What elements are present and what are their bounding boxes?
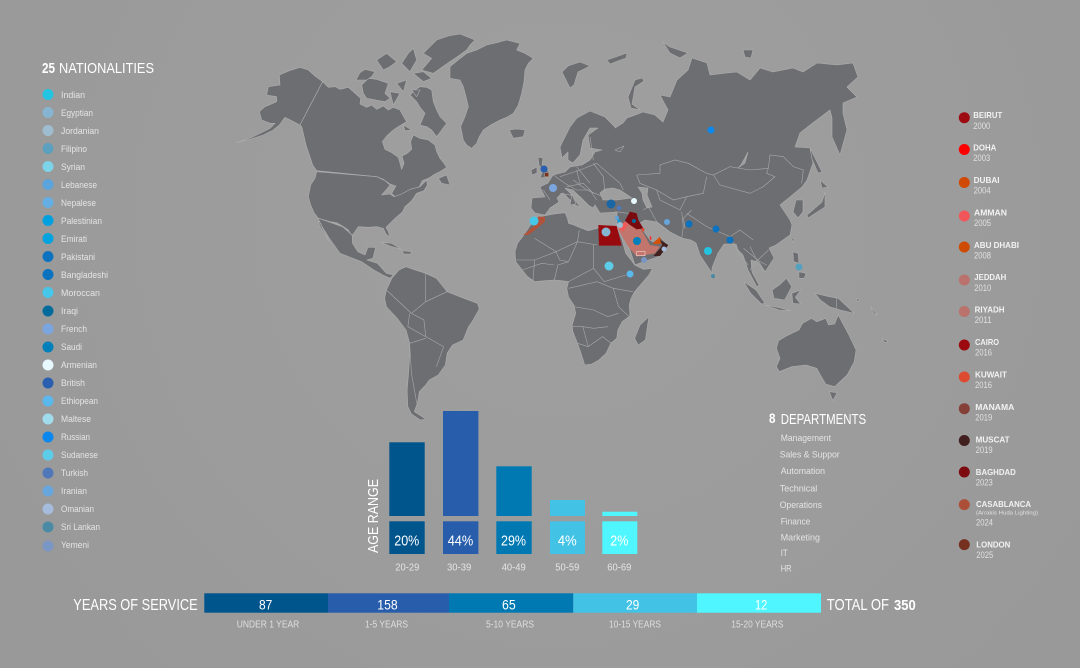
legend: nationalities: Russian (61, 432, 90, 443)
heading: 25 nationalities: 25 (42, 60, 55, 77)
North America and Arctic land (237, 34, 533, 242)
service labels: 1-5 YEARS (365, 620, 408, 631)
age labels: 50-59 (555, 563, 580, 574)
legend: office cities and years: 2005 (974, 218, 991, 228)
legend: nationalities: Iraqi (61, 306, 78, 317)
age labels: 20-29 (395, 563, 420, 574)
service labels: UNDER 1 YEAR (237, 620, 299, 631)
stacked bar: 12 (755, 596, 767, 612)
legend: office cities and years: 2003 (973, 153, 990, 163)
country: Jordan (617, 222, 628, 232)
legend: office cities and years: 2025 (976, 550, 993, 560)
legend: office cities and years: CASABLANCA (976, 499, 1031, 509)
legend: nationalities: Syrian (61, 162, 85, 173)
service labels: 15-20 YEARS (731, 620, 784, 631)
total of 350: TOTAL OF (827, 597, 889, 614)
legend: office cities and years: CAIRO (975, 337, 999, 347)
legend: office cities and years: 2000 (973, 121, 990, 131)
legend: office cities and years: 2023 (976, 478, 993, 488)
heading: 25 nationalities: NATIONALITIES (59, 60, 154, 77)
legend: office cities and years: 2019 (975, 413, 992, 423)
legend: nationalities (42, 89, 108, 552)
legend: office cities and years (959, 110, 1038, 560)
departments list: Sales & Suppor (780, 449, 840, 460)
legend: office cities and years: BAGHDAD (976, 467, 1016, 477)
departments list: Automation (781, 466, 825, 477)
legend: nationalities: Pakistani (61, 252, 95, 263)
legend: nationalities: Indian (61, 90, 85, 101)
legend: office cities and years: RIYADH (975, 304, 1005, 314)
country: Oman (653, 240, 668, 256)
legend: nationalities: Iranian (61, 486, 87, 497)
stacked bar: 29 (626, 596, 639, 612)
departments list: Finance (781, 516, 810, 527)
country borders (318, 137, 836, 403)
legend: office cities and years: 2004 (974, 186, 991, 196)
nationality markers on map (530, 126, 802, 278)
heading: years of service: YEARS OF SERVICE (73, 597, 198, 614)
legend: office cities and years: BEIRUT (973, 110, 1003, 120)
legend: office cities and years: 2010 (974, 283, 991, 293)
percentage boxes: 44% (448, 533, 473, 549)
legend: nationalities: Turkish (61, 468, 88, 479)
legend: office cities and years: 2024 (976, 518, 993, 528)
country: Saudi Arabia (618, 222, 660, 257)
legend: nationalities: Filipino (61, 144, 87, 155)
heading: 8 departments (769, 410, 866, 428)
chart: age range bars (365, 411, 637, 574)
service labels: 10-15 YEARS (609, 620, 661, 631)
Eurasia (531, 42, 858, 287)
legend: nationalities: Egyptian (61, 108, 93, 119)
legend: office cities and years: LONDON (976, 539, 1010, 549)
country: Morocco (523, 217, 545, 235)
legend: office cities and years: 2016 (975, 348, 992, 358)
country: Iraq (625, 212, 643, 229)
percentage boxes: 2% (610, 533, 628, 549)
percentage boxes: 4% (558, 533, 577, 549)
percentage boxes: 29% (501, 533, 526, 549)
departments list: Management (781, 433, 831, 444)
legend: nationalities: Lebanese (61, 180, 97, 191)
heading: 8 departments: DEPARTMENTS (781, 411, 866, 428)
percentage boxes: 20% (394, 533, 419, 549)
years of service bar (73, 593, 916, 631)
stacked bar: 87 (259, 596, 272, 612)
service labels: 5-10 YEARS (486, 620, 534, 631)
legend: office cities and years: MUSCAT (976, 435, 1010, 445)
country: Qatar (650, 236, 651, 240)
country: Yemen outline patch (637, 252, 645, 256)
departments list: Operations (780, 500, 822, 511)
legend: nationalities: Nepalese (61, 198, 96, 209)
departments list: Marketing (781, 533, 820, 544)
departments list: Technical (780, 484, 817, 495)
legend: nationalities: Ethiopean (61, 396, 98, 407)
world map (237, 34, 888, 420)
legend: nationalities: Bangladeshi (61, 270, 108, 281)
legend: nationalities: Armenian (61, 360, 97, 371)
legend: office cities and years: 2008 (974, 250, 991, 260)
country: Kuwait (642, 228, 645, 232)
legend: nationalities: Sri Lankan (61, 522, 100, 533)
heading: age range: AGE RANGE (365, 479, 382, 553)
age labels: 40-49 (502, 563, 526, 574)
stacked bar (204, 593, 821, 613)
legend: nationalities: British (61, 378, 85, 389)
legend: nationalities: Sudanese (61, 450, 98, 461)
legend: office cities and years: MANAMA (975, 402, 1014, 412)
legend: office cities and years: JEDDAH (974, 272, 1006, 282)
country: England (545, 173, 549, 177)
heading: 8 departments: 8 (769, 410, 776, 426)
departments list: IT (781, 548, 788, 559)
country: UAE (653, 237, 662, 244)
legend: nationalities: French (61, 324, 87, 335)
stacked bar: 158 (377, 596, 398, 612)
Central America, South America, Africa, Oceania (318, 213, 888, 420)
legend: office cities and years: 2016 (975, 380, 992, 390)
total of 350: 350 (894, 597, 916, 614)
percentage boxes (389, 521, 637, 554)
legend: nationalities: Palestinian (61, 216, 102, 227)
legend: nationalities: Saudi (61, 342, 82, 353)
age labels: 60-69 (607, 563, 632, 574)
legend: nationalities: Jordanian (61, 126, 99, 137)
legend: nationalities: Maltese (61, 414, 91, 425)
departments list: HR (781, 564, 792, 575)
legend: office cities and years: DUBAI (974, 175, 1000, 185)
legend: office cities and years: KUWAIT (975, 370, 1008, 380)
service labels (237, 620, 784, 631)
age labels (395, 563, 632, 574)
legend: office cities and years: 2011 (975, 315, 992, 325)
age labels: 30-39 (447, 563, 472, 574)
highlighted office countries (523, 173, 668, 257)
legend: nationalities: Omanian (61, 504, 94, 515)
departments list (769, 410, 866, 575)
legend: nationalities: Emirati (61, 234, 87, 245)
legend: office cities and years: ABU DHABI (974, 240, 1019, 250)
legend: office cities and years: (Arrakis Huda Lighting) (976, 510, 1038, 516)
legend: office cities and years: DOHA (973, 142, 996, 152)
stacked bar: 65 (502, 596, 516, 612)
legend: office cities and years: AMMAN (974, 207, 1007, 217)
legend: nationalities: Moroccan (61, 288, 100, 299)
legend: nationalities: Yemeni (61, 540, 89, 551)
country: Egypt (598, 225, 622, 246)
bars (389, 411, 637, 516)
legend: office cities and years: 2019 (976, 445, 993, 455)
